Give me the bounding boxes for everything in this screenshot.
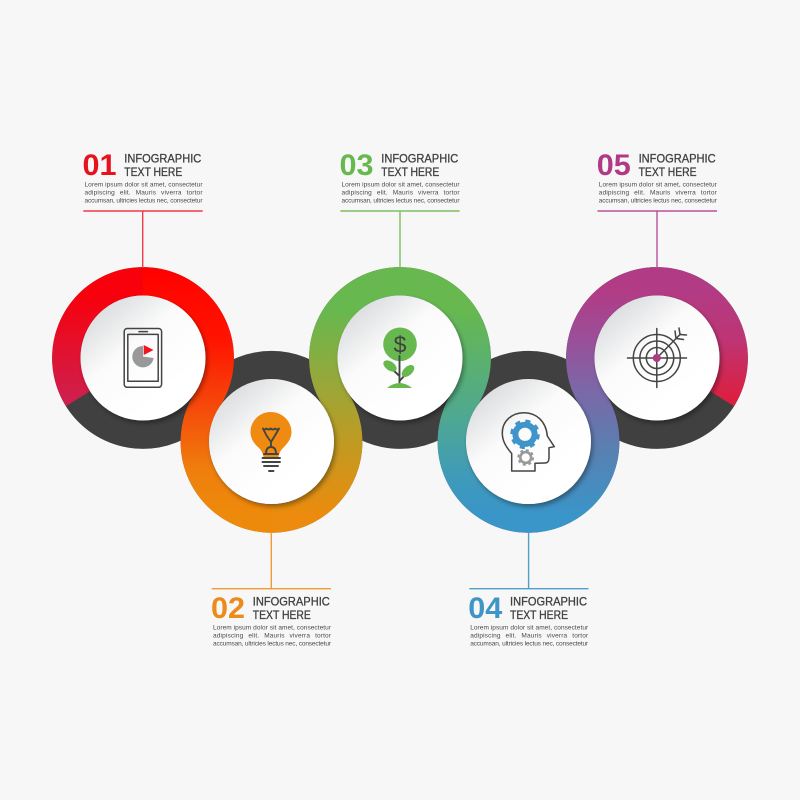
text block 05: 05: [597, 149, 631, 182]
text block 02: adipiscing elit. Mauris viverra tortor: [213, 633, 332, 640]
text block 02: Lorem ipsum dolor sit amet, consectetur: [213, 625, 332, 632]
text block 01: [82, 149, 203, 204]
text block 05: accumsan, ultricies lectus nec, consectetur: [599, 197, 718, 204]
text block 01: Lorem ipsum dolor sit amet, consectetur: [84, 182, 203, 189]
text block 03: TEXT HERE: [381, 165, 439, 179]
text block 05: Lorem ipsum dolor sit amet, consectetur: [599, 182, 718, 189]
dark base rings: [66, 281, 734, 518]
text block 02: [211, 592, 332, 647]
text block 03: INFOGRAPHIC: [381, 152, 459, 166]
connector 02: [212, 532, 331, 589]
icon: head with gears: [502, 413, 554, 471]
icon: phone with pie chart: [124, 328, 162, 387]
text block 05: [597, 149, 718, 204]
gradient ribbon weaving through the circles: [66, 281, 734, 519]
icon: light bulb: [250, 412, 292, 471]
text block 01: TEXT HERE: [124, 165, 182, 179]
text block 02: TEXT HERE: [253, 608, 311, 622]
connector 01: [83, 211, 203, 268]
text block 03: [340, 149, 460, 204]
text block 03: adipiscing elit. Mauris viverra tortor: [342, 190, 460, 197]
text block 03: accumsan, ultricies lectus nec, consectetur: [342, 197, 460, 204]
text block 01: INFOGRAPHIC: [124, 152, 202, 166]
text block 04: INFOGRAPHIC: [510, 595, 587, 609]
connector 04: [469, 532, 588, 589]
text block 05: INFOGRAPHIC: [639, 152, 716, 166]
text block 02: INFOGRAPHIC: [253, 595, 330, 609]
connector 05: [598, 211, 717, 268]
text block 04: adipiscing elit. Mauris viverra tortor: [470, 633, 589, 640]
text block 05: TEXT HERE: [639, 165, 697, 179]
white discs: [80, 296, 720, 504]
text block 05: adipiscing elit. Mauris viverra tortor: [599, 190, 718, 197]
icon: target with arrow: [628, 328, 686, 388]
text block 01: 01: [82, 149, 116, 182]
text block 04: accumsan, ultricies lectus nec, consectetur: [470, 640, 589, 647]
connector 03: [340, 211, 460, 268]
text block 04: 04: [468, 592, 503, 625]
text block 01: accumsan, ultricies lectus nec, consectetur: [84, 197, 203, 204]
text block 04: TEXT HERE: [510, 608, 568, 622]
icon: money plant: [381, 328, 417, 388]
text block 03: Lorem ipsum dolor sit amet, consectetur: [342, 182, 460, 189]
icon: money plant: $: [394, 332, 407, 358]
text block 02: 02: [211, 592, 245, 625]
text block 02: accumsan, ultricies lectus nec, consectetur: [213, 640, 332, 647]
text block 04: [468, 592, 589, 647]
text block 03: 03: [340, 149, 374, 182]
text block 04: Lorem ipsum dolor sit amet, consectetur: [470, 625, 589, 632]
text block 01: adipiscing elit. Mauris viverra tortor: [84, 190, 203, 197]
